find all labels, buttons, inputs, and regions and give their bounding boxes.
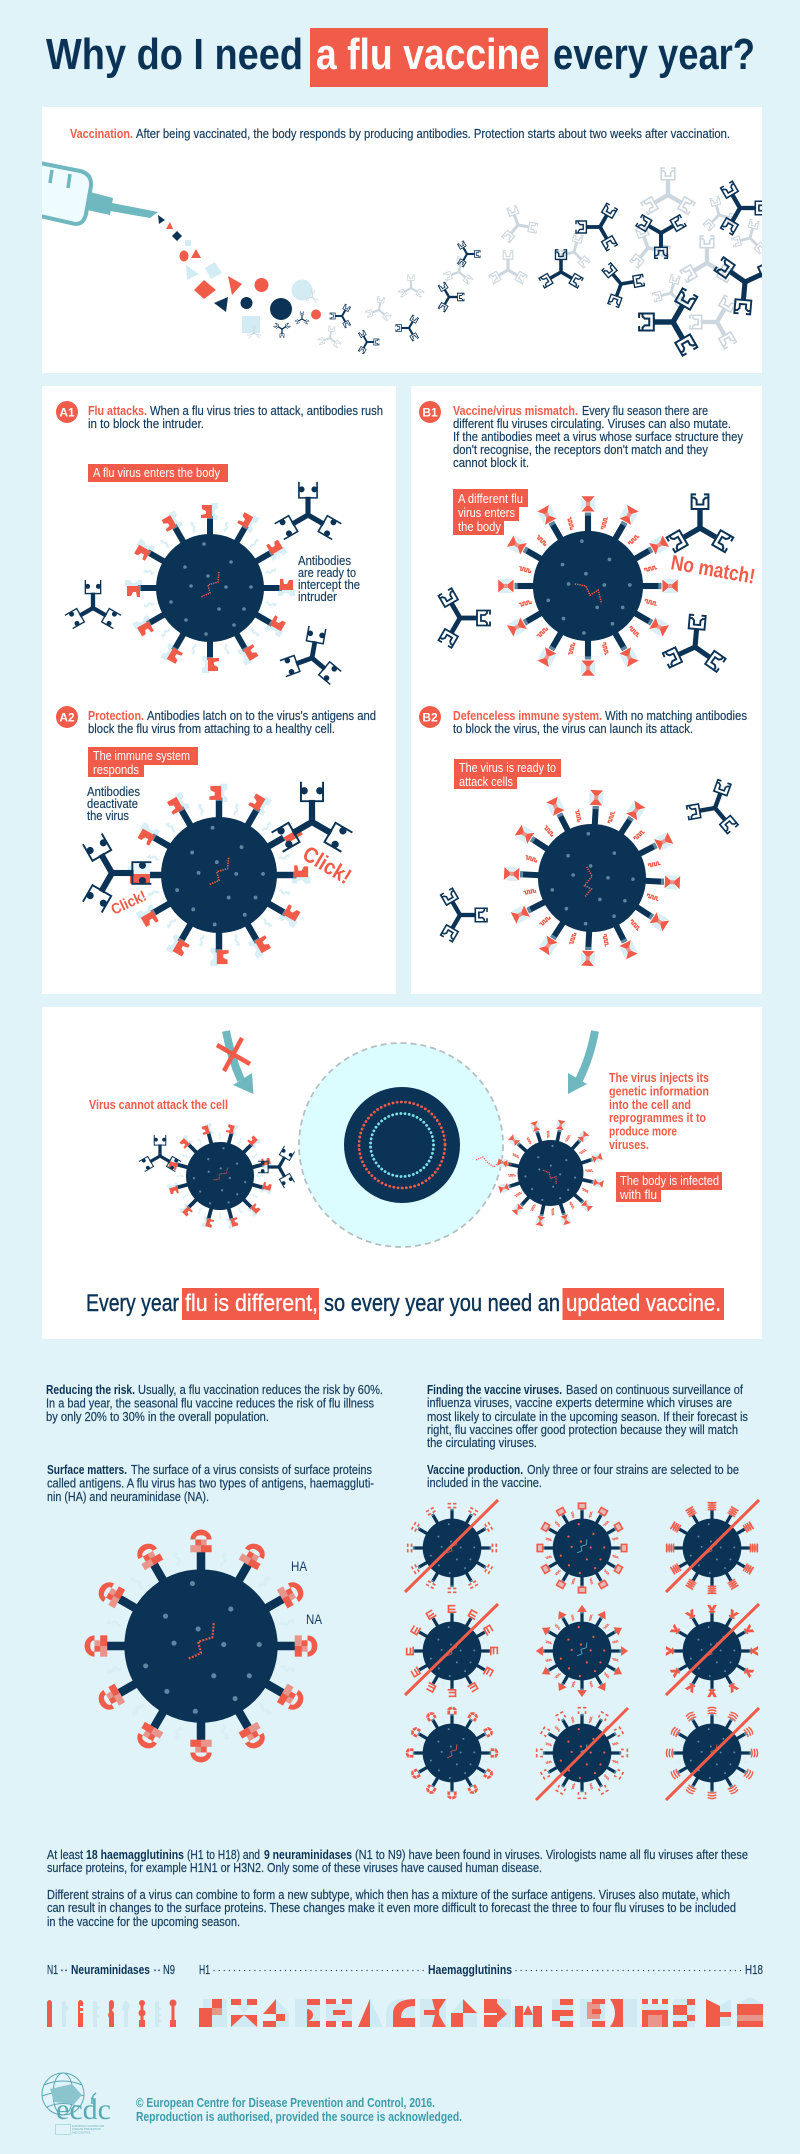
text: reducing the risk: In a bad year, the seasonal flu vaccine reduces the risk of flu illness (46, 1396, 374, 1410)
antibody (275, 482, 341, 540)
arrow: blocked (226, 1031, 254, 1094)
callout: infected: The body is infected (620, 1174, 719, 1188)
text: strains explanation: in the vaccine for the upcoming season. (47, 1915, 240, 1929)
legend labels: H18 (745, 1963, 763, 1977)
label: injects: into the cell and (609, 1097, 691, 1112)
virus B1 (498, 496, 678, 676)
text: surface matters: nin (HA) and neuraminidase (NA). (47, 1490, 209, 1504)
text: finding the vaccine viruses (427, 1383, 748, 1450)
virus B2 (500, 786, 684, 970)
text: flu attacks (88, 404, 383, 431)
badge B2 (419, 706, 441, 728)
click labels: Click! (298, 841, 356, 889)
legend labels (47, 1963, 763, 1977)
title (46, 28, 755, 87)
text: protection: Protection. (88, 709, 144, 723)
text: protection: Antibodies latch on to the virus's antigens and (147, 709, 376, 723)
text: mismatch: If the antibodies meet a virus whose surface structure they (453, 430, 744, 444)
legend labels: ·· (60, 1963, 68, 1977)
text: flu attacks: in to block the intruder. (88, 417, 204, 431)
arrow: entering (568, 1031, 595, 1094)
label: injects: genetic information (609, 1084, 709, 1098)
text: haemagglutinins explanation (47, 1848, 748, 1875)
label: antibodies deactivate: deactivate (87, 797, 138, 811)
icon: syringe (40, 163, 158, 224)
label: antibodies ready: intruder (298, 590, 337, 604)
callout: ready to attack: attack cells (459, 775, 513, 789)
cell (299, 1043, 503, 1247)
text: finding the vaccine viruses: influenza viruses, vaccine experts determine which viruses are (427, 1396, 732, 1410)
badge A2 (56, 706, 78, 728)
footer: copyright (136, 2096, 462, 2124)
text: mismatch (453, 404, 744, 470)
legend: neuraminidases shapes (47, 2000, 176, 2027)
label: injects: viruses. (609, 1137, 649, 1152)
footer: ecdc logo: AND CONTROL (72, 2130, 91, 2134)
callout: different virus (453, 489, 528, 535)
label: no match: No match! (669, 551, 757, 589)
text: defenceless: With no matching antibodies (605, 709, 747, 723)
antibody (258, 1146, 295, 1188)
text: defenceless: to block the virus, the virus can launch its attack. (453, 722, 693, 736)
headline: every year: updated vaccine. (566, 1290, 721, 1317)
callout: ready to attack (454, 759, 561, 789)
callout: different virus: the body (458, 520, 502, 534)
virus: infecting (487, 1109, 614, 1237)
label HA: HA (291, 1558, 308, 1574)
legend labels: Neuraminidases (71, 1963, 150, 1977)
click labels (109, 841, 356, 919)
text: haemagglutinins explanation: surface proteins, for example H1N1 or H3N2. Only some of these viruses have caused human disease. (47, 1861, 542, 1875)
text: mismatch: Vaccine/virus mismatch. (453, 404, 578, 418)
text: reducing the risk: Usually, a flu vaccination reduces the risk by 60%. (138, 1383, 383, 1397)
strain 2 selected (536, 1502, 628, 1594)
logo wordmark: ecdc (56, 2093, 111, 2126)
antibody (683, 773, 750, 836)
panel: A column (42, 386, 396, 994)
badge B1: B1 (422, 406, 438, 420)
strain 3 rejected (666, 1500, 759, 1594)
virus A2 (128, 784, 310, 966)
antibody (439, 588, 490, 648)
legend labels: ·· (153, 1963, 161, 1977)
badge B1 (419, 401, 441, 423)
label: injects (609, 1070, 709, 1152)
strain 6 rejected (666, 1604, 759, 1697)
callout: ready to attack: The virus is ready to (459, 761, 556, 775)
callout: different virus: virus enters (458, 506, 515, 520)
text: surface matters: called antigens. A flu virus has two types of antigens, haemaggluti- (47, 1476, 374, 1490)
label: antibodies deactivate: the virus (87, 809, 129, 823)
text: mismatch: don't recognise, the receptors don't match and they (453, 443, 709, 457)
text: haemagglutinins explanation: 9 neuraminidases (264, 1848, 352, 1862)
antibody (277, 622, 348, 686)
footer: copyright: Reproduction is authorised, provided the source is acknowledged. (136, 2110, 462, 2124)
text: reducing the risk: by only 20% to 30% in the overall population. (46, 1410, 269, 1424)
antibodies navy (274, 181, 782, 356)
label: antibodies ready: intercept the (298, 578, 360, 592)
antibody (662, 613, 729, 672)
text: mismatch: cannot block it. (453, 456, 529, 470)
footer: copyright: © European Centre for Disease Prevention and Control, 2016. (136, 2096, 435, 2110)
badge A1 (56, 401, 78, 423)
text: vaccine production: Only three or four strains are selected to be (527, 1463, 739, 1477)
vaccination text: Vaccination. (70, 127, 133, 141)
text: vaccine production: included in the vaccine. (427, 1476, 542, 1490)
headline: every year: so every year you need an (324, 1290, 560, 1317)
virus A1 (125, 503, 295, 673)
legend labels: H1 (199, 1963, 210, 1977)
legend labels: Haemagglutinins (428, 1963, 512, 1977)
legend labels: N1 (47, 1963, 58, 1977)
footer: ecdc logo: EUROPEAN CENTRE FOR (72, 2124, 104, 2128)
text: vaccine production: Vaccine production. (427, 1463, 523, 1477)
title: a flu vaccine (316, 30, 540, 79)
title: Why do I need (46, 30, 303, 79)
headline: every year (86, 1288, 724, 1320)
text: surface matters (47, 1463, 374, 1504)
virus grid (405, 1500, 759, 1800)
text: finding the vaccine viruses: Finding the vaccine viruses. (427, 1383, 562, 1397)
footer: ecdc logo: DISEASE PREVENTION (72, 2127, 101, 2131)
text: haemagglutinins explanation: 18 haemagglutinins (86, 1848, 184, 1862)
antibody (139, 1135, 181, 1172)
panel: B column (411, 386, 762, 994)
antibodies swarm (247, 168, 772, 352)
headline: every year: Every year (86, 1290, 179, 1317)
text: vaccine production (427, 1463, 739, 1490)
antibody (441, 888, 487, 942)
vaccine particles (158, 215, 321, 333)
bound antibody right (271, 782, 353, 852)
badge B2: B2 (422, 710, 438, 724)
text: mismatch: Every flu season there are (582, 404, 708, 418)
text: defenceless (453, 709, 747, 736)
text: surface matters: Surface matters. (47, 1463, 127, 1477)
label: antibodies ready: are ready to (298, 566, 356, 580)
bound antibody left (83, 833, 151, 913)
badge A2: A2 (59, 710, 75, 724)
label: antibodies ready: Antibodies (298, 554, 351, 568)
text: finding the vaccine viruses: the circulating viruses. (427, 1436, 537, 1450)
strain 7 selected (407, 1708, 497, 1798)
icon: coral cross (217, 1038, 250, 1071)
text: reducing the risk: Reducing the risk. (46, 1383, 135, 1397)
antibody (667, 494, 733, 552)
panel: cell infection (42, 1007, 762, 1339)
headline: every year: flu is different, (185, 1290, 318, 1317)
callout: virus enters: A flu virus enters the body (93, 466, 221, 480)
text: strains explanation (47, 1888, 736, 1929)
label: antibodies ready (298, 554, 360, 604)
antibody (65, 580, 121, 629)
strain 1 rejected (405, 1500, 498, 1593)
text: finding the vaccine viruses: Based on continuous surveillance of (566, 1383, 743, 1397)
label: cannot attack: Virus cannot attack the cell (89, 1097, 228, 1112)
label: antibodies deactivate: Antibodies (87, 785, 140, 799)
text: mismatch: different flu viruses circulating. Viruses can also mutate. (453, 417, 731, 431)
strain 5 selected (536, 1605, 628, 1697)
title: every year? (553, 30, 755, 79)
injected genetic material (476, 1157, 512, 1167)
text: finding the vaccine viruses: most likely to circulate in the upcoming season. If their forecast is (427, 1410, 748, 1424)
callout: immune system: The immune system (93, 749, 190, 763)
text: protection: block the flu virus from attaching to a healthy cell. (88, 722, 335, 736)
callout: different virus: A different flu (458, 492, 523, 506)
text: haemagglutinins explanation: At least (47, 1848, 83, 1862)
text: finding the vaccine viruses: right, flu vaccines offer good protection because they will match (427, 1423, 738, 1437)
text: flu attacks: Flu attacks. (88, 404, 147, 418)
callout: infected: with flu (619, 1188, 657, 1202)
big virus diagram (85, 1530, 323, 1762)
click labels: Click! (109, 888, 149, 919)
strain 4 rejected (405, 1604, 498, 1697)
badge A1: A1 (59, 406, 75, 420)
label: injects: reprogrammes it to (609, 1110, 706, 1125)
callout: immune system: responds (93, 763, 139, 777)
footer: ecdc logo (42, 2073, 111, 2134)
text: haemagglutinins explanation: (H1 to H18) and (187, 1848, 260, 1862)
label: injects: produce more (609, 1124, 677, 1138)
text: flu attacks: When a flu virus tries to attack, antibodies rush (150, 404, 383, 418)
globe (42, 2073, 84, 2115)
label NA: NA (306, 1611, 323, 1627)
legend labels: N9 (163, 1963, 175, 1977)
callout: immune system (88, 747, 198, 777)
text: reducing the risk (46, 1383, 383, 1424)
text: strains explanation: Different strains of a virus can combine to form a new subtype, which then has a mixture of the surface antigens. Viruses also mutate, which (47, 1888, 730, 1902)
virus: blocked (154, 1110, 286, 1242)
callout: infected (616, 1172, 722, 1202)
legend: haemagglutinins shapes (199, 1997, 763, 2027)
strain 8 rejected (536, 1707, 628, 1800)
text: defenceless: Defenceless immune system. (453, 709, 602, 723)
label: antibodies deactivate (87, 785, 140, 823)
text: protection (88, 709, 376, 736)
label: injects: The virus injects its (609, 1070, 709, 1085)
text: haemagglutinins explanation: (N1 to N9) have been found in viruses. Virologists name all flu viruses after these (355, 1848, 748, 1862)
text: surface matters: The surface of a virus consists of surface proteins (131, 1463, 372, 1477)
panel: vaccination (40, 107, 782, 373)
strain 9 rejected (666, 1707, 759, 1800)
vaccination text: After being vaccinated, the body responds by producing antibodies. Protection starts about two weeks after vaccination. (136, 127, 730, 141)
